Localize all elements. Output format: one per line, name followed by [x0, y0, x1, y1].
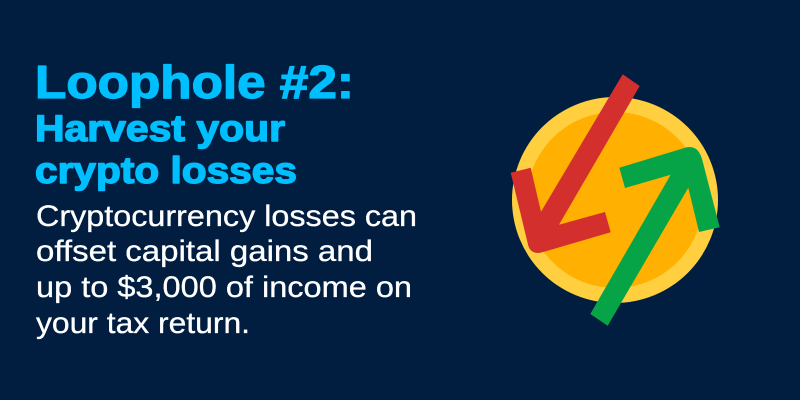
body text: up to $3,000 of income on	[36, 271, 412, 304]
arrow: red down	[511, 74, 640, 253]
body text: Cryptocurrency losses can	[36, 200, 417, 233]
coin outer rim	[512, 97, 718, 303]
body text	[36, 200, 417, 340]
body text: offset capital gains and	[36, 235, 373, 268]
arrow: green up	[590, 147, 720, 326]
subtitle: Harvest your crypto losses: Harvest your	[35, 108, 285, 149]
subtitle: Harvest your crypto losses: crypto losses	[35, 150, 297, 191]
subtitle: Harvest your crypto losses	[35, 108, 297, 191]
body text: your tax return.	[36, 307, 250, 340]
coin inner face	[527, 112, 703, 288]
icon: coin with arrows	[511, 74, 720, 326]
title: Loophole #2: Loophole #2:	[35, 56, 354, 108]
